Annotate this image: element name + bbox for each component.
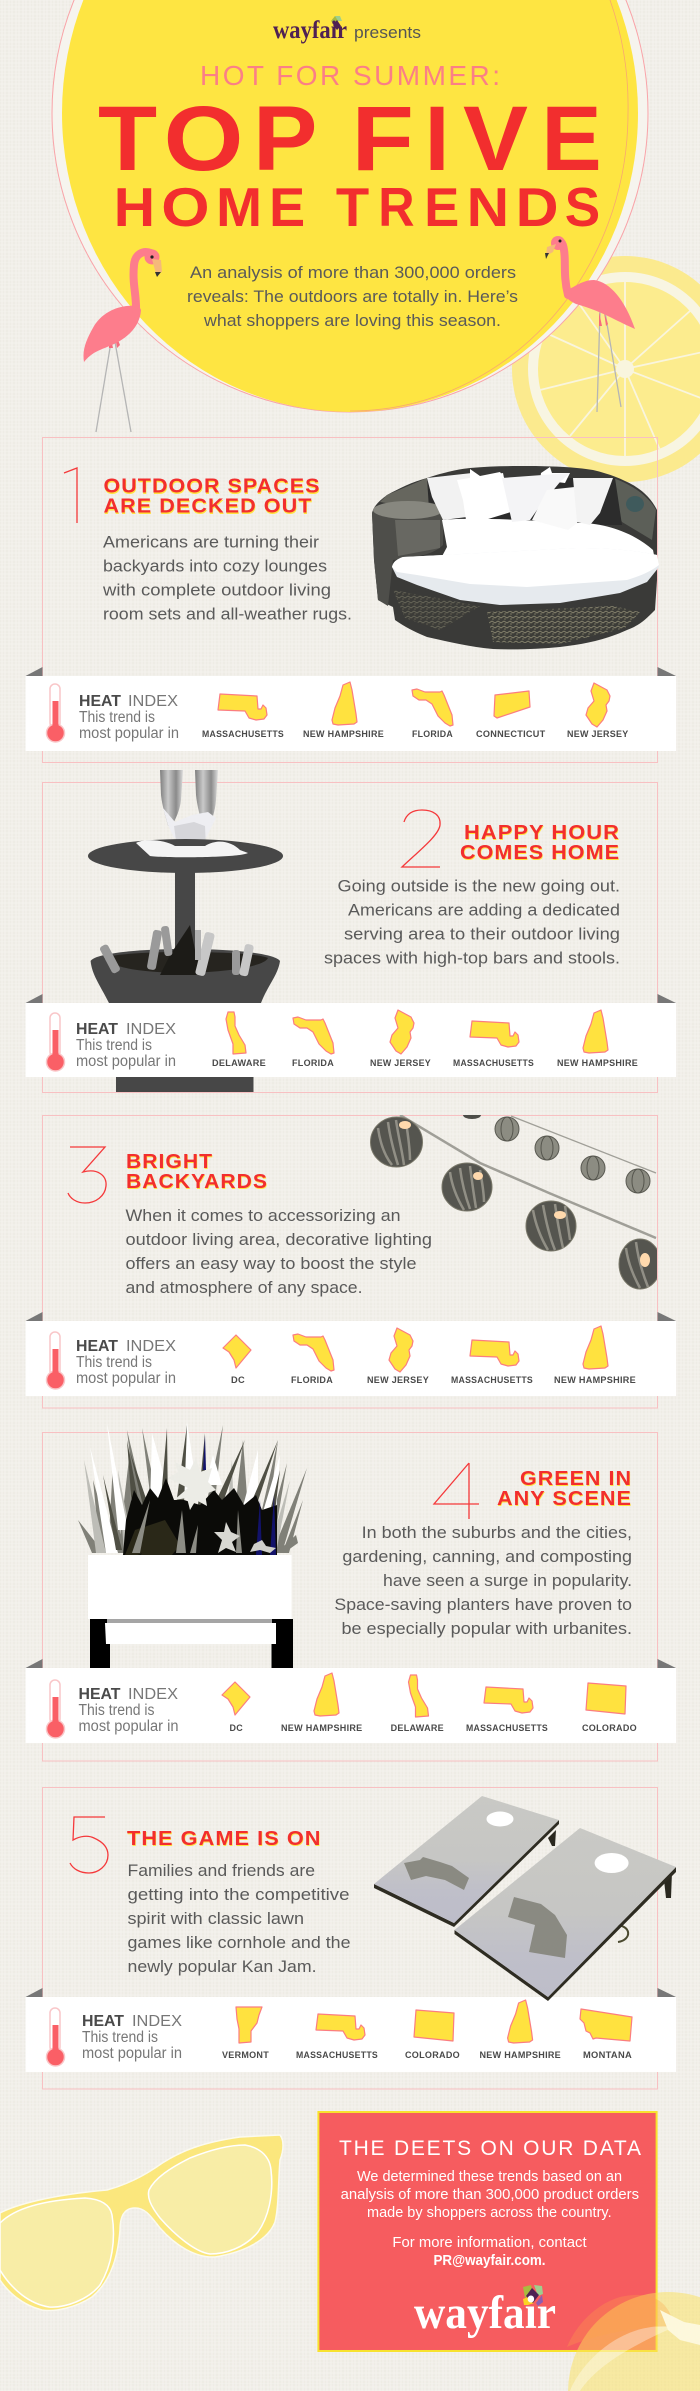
state: DC: [222, 1682, 250, 1734]
icon: left flamingo: [83, 250, 162, 432]
heat index label: INDEX: [128, 693, 179, 710]
title: T: [336, 177, 369, 238]
state: New Jersey: [370, 1010, 431, 1069]
planter box: [88, 1555, 292, 1619]
title: E: [541, 88, 602, 190]
banner: heat index: [26, 1312, 676, 1396]
heat index label: [82, 2013, 183, 2062]
state: New Jersey: [567, 683, 629, 740]
state: Massachusetts: [202, 694, 284, 740]
title: E: [269, 177, 305, 238]
state: Massachusetts: [451, 1340, 533, 1386]
numeral 5: [70, 1817, 108, 1873]
state: Delaware: [212, 1012, 266, 1069]
heading: THE GAME IS ON: [128, 1828, 322, 1851]
heading: HAPPY HOUR: [464, 822, 620, 845]
body text: have seen a surge in popularity.: [383, 1571, 632, 1590]
seat: [440, 519, 655, 560]
icon: right flamingo: [545, 236, 635, 412]
numeral 1: [64, 468, 77, 523]
heading: [104, 475, 321, 519]
logo: wayfair presents: [273, 16, 421, 44]
title: S: [565, 177, 600, 238]
state: Massachusetts: [453, 1021, 534, 1069]
beach ball: [567, 2292, 700, 2391]
state: Massachusetts: [296, 2014, 378, 2061]
body text: [126, 1206, 432, 1297]
hanging buds: [131, 1553, 218, 1568]
intro text: reveals: The outdoors are totally in. Here’s: [187, 287, 518, 306]
heat index label: This trend is: [82, 2029, 158, 2046]
title: [98, 60, 602, 238]
state: Florida: [412, 689, 453, 740]
state: Delaware: DELAWARE: [212, 1058, 266, 1069]
state: New Hampshire: NEW HAMPSHIRE: [554, 1375, 636, 1386]
state: Massachusetts: [466, 1687, 548, 1734]
state: New Hampshire: [557, 1010, 638, 1069]
heading: ARE DECKED OUT: [104, 496, 313, 519]
intro text: [187, 263, 518, 330]
heat index label: This trend is: [76, 1354, 152, 1371]
intro text: what shoppers are loving this season.: [203, 311, 501, 330]
numeral 3: [68, 1147, 106, 1203]
panel: trend 4: [26, 1422, 676, 1761]
state: New Hampshire: NEW HAMPSHIRE: [303, 729, 384, 740]
body text: room sets and all-weather rugs.: [103, 605, 352, 624]
navy blades: [203, 1435, 276, 1555]
state: Florida: FLORIDA: [291, 1375, 333, 1386]
heading: THE GAME IS ON: [127, 1827, 322, 1850]
wicker back and base: [372, 466, 657, 649]
state: DC: [223, 1335, 251, 1386]
icon: thermometer: [46, 1680, 64, 1738]
heat index label: HEAT: [78, 1686, 121, 1703]
state: Massachusetts: MASSACHUSETTS: [453, 1058, 534, 1069]
armrest: [372, 501, 443, 606]
heading: OUTDOOR SPACES: [104, 475, 320, 498]
state: New Hampshire: NEW HAMPSHIRE: [557, 1058, 638, 1069]
heading: GREEN IN: [520, 1468, 632, 1491]
heat index label: [78, 1686, 179, 1735]
state: Montana: MONTANA: [583, 2050, 632, 2061]
white blades: [90, 1422, 280, 1553]
state: Colorado: COLORADO: [582, 1723, 637, 1734]
logo: wayfair: wayfair: [414, 2287, 556, 2339]
title: T: [98, 88, 157, 190]
black mass: [123, 1478, 277, 1555]
body text: backyards into cozy lounges: [103, 557, 327, 576]
title: I: [425, 88, 449, 190]
banner: heat index: [26, 1659, 676, 1743]
white flower: [168, 1458, 216, 1510]
heat index label: INDEX: [126, 1338, 177, 1355]
heading: [497, 1467, 632, 1511]
heading: ANY SCENE: [498, 1488, 632, 1511]
heat index label: [76, 1021, 177, 1070]
state: DC: DC: [231, 1375, 245, 1386]
heat index label: This trend is: [79, 709, 155, 726]
state: New Hampshire: [480, 2000, 561, 2061]
state: Colorado: [582, 1683, 637, 1734]
heat index label: INDEX: [132, 2013, 183, 2030]
heading: OUTDOOR SPACES: [104, 476, 321, 499]
title: H: [114, 177, 155, 238]
state: New Jersey: [367, 1328, 429, 1386]
icon: thermometer: [46, 1013, 64, 1071]
title: D: [516, 177, 559, 238]
body text: getting into the competitive: [128, 1885, 350, 1904]
body text: Space-saving planters have proven to: [334, 1595, 632, 1614]
panel body text: [341, 2169, 639, 2269]
banner: heat index: [26, 1988, 676, 2072]
body text: Families and friends are: [128, 1861, 315, 1880]
front cushion: [392, 548, 659, 605]
panel body text: We determined these trends based on an: [357, 2169, 622, 2185]
state: New Hampshire: [303, 682, 384, 740]
state: DC: DC: [230, 1723, 243, 1734]
heat index label: [76, 1338, 177, 1387]
panel body text: made by shoppers across the country.: [367, 2205, 612, 2221]
state: Florida: [291, 1334, 334, 1386]
left lens: [0, 2198, 114, 2307]
heat index label: HEAT: [82, 2013, 125, 2030]
state: New Hampshire: [281, 1673, 362, 1734]
banner: heat index: [26, 667, 676, 751]
title: R: [378, 177, 415, 238]
state: Delaware: DELAWARE: [391, 1723, 444, 1734]
lemon slice: [512, 256, 700, 482]
intro text: An analysis of more than 300,000 orders: [190, 263, 516, 282]
body text: [102, 533, 352, 624]
state: Florida: FLORIDA: [412, 729, 453, 740]
body text: Americans are adding a dedicated: [348, 901, 620, 920]
sunglasses: [0, 2135, 283, 2310]
heat index label: most popular in: [79, 725, 179, 742]
heat index label: most popular in: [78, 1718, 178, 1735]
small flowers: [214, 1522, 240, 1553]
title: HOT FOR SUMMER:: [200, 60, 500, 91]
title: O: [164, 88, 243, 190]
panel heading: THE DEETS ON OUR DATA: [339, 2137, 641, 2160]
title: P: [253, 88, 317, 190]
state: Colorado: COLORADO: [405, 2050, 460, 2061]
olive blades: [103, 1425, 280, 1550]
body text: Americans are turning their: [103, 533, 319, 552]
heat index label: most popular in: [76, 1053, 176, 1070]
title: V: [463, 88, 528, 190]
heading: [460, 821, 620, 865]
body text: Going outside is the new going out.: [338, 877, 620, 896]
state: New Hampshire: NEW HAMPSHIRE: [480, 2050, 561, 2061]
state: Florida: [292, 1017, 334, 1069]
state: Vermont: VERMONT: [222, 2050, 269, 2061]
state: Montana: [580, 2009, 632, 2061]
state: Massachusetts: MASSACHUSETTS: [296, 2050, 378, 2061]
heat index label: HEAT: [76, 1338, 119, 1355]
product: planter with grasses: [78, 1422, 307, 1668]
state: New Jersey: NEW JERSEY: [370, 1058, 431, 1069]
title: E: [424, 177, 459, 238]
state: Massachusetts: MASSACHUSETTS: [466, 1723, 548, 1734]
panel: the deets on our data: [318, 2112, 657, 2351]
logo: wayfair presents: presents: [354, 23, 421, 42]
heat index label: INDEX: [126, 1021, 177, 1038]
panel body text: analysis of more than 300,000 product orders: [341, 2187, 639, 2203]
body text: [324, 877, 620, 968]
body text: spaces with high-top bars and stools.: [324, 949, 620, 968]
panel body text: PR@wayfair.com.: [434, 2253, 546, 2269]
string lights: [370, 1111, 661, 1289]
wicker texture: [487, 606, 640, 644]
logo: wayfair presents: wayfair: [273, 17, 347, 44]
pillows: [427, 473, 472, 520]
heat index label: most popular in: [76, 1370, 176, 1387]
heading: GREEN IN: [520, 1467, 632, 1490]
heading: BRIGHT: [126, 1151, 214, 1174]
state: New Jersey: NEW JERSEY: [367, 1375, 429, 1386]
state: Connecticut: CONNECTICUT: [476, 729, 546, 740]
state: New Jersey: NEW JERSEY: [567, 729, 629, 740]
state: New Hampshire: [554, 1326, 636, 1386]
heat index label: This trend is: [78, 1702, 155, 1719]
body text: [128, 1861, 350, 1976]
heading: BACKYARDS: [126, 1171, 268, 1194]
title: O: [161, 177, 210, 238]
icon: thermometer: [46, 684, 64, 742]
state: Delaware: [391, 1675, 444, 1734]
state: Massachusetts: MASSACHUSETTS: [202, 729, 284, 740]
heat index label: HEAT: [76, 1021, 119, 1038]
header circle: [52, 0, 648, 412]
body text: games like cornhole and the: [128, 1933, 350, 1952]
right lens: [148, 2145, 272, 2254]
grey blades: [78, 1425, 307, 1553]
body text: outdoor living area, decorative lighting: [126, 1230, 432, 1249]
heat index label: most popular in: [82, 2045, 182, 2062]
body text: gardening, canning, and composting: [342, 1547, 632, 1566]
body text: newly popular Kan Jam.: [128, 1957, 316, 1976]
heat index label: This trend is: [76, 1037, 152, 1054]
heat index label: INDEX: [128, 1686, 179, 1703]
state: New Hampshire: NEW HAMPSHIRE: [281, 1723, 362, 1734]
product: cooler bar table: [88, 770, 283, 1092]
heading: COMES HOME: [460, 841, 620, 864]
title: F: [352, 88, 414, 190]
body text: spirit with classic lawn: [128, 1909, 304, 1928]
grey detail blades: [132, 1500, 242, 1553]
pale blades: [84, 1460, 290, 1553]
state: Connecticut: [476, 691, 546, 740]
product: cornhole boards: [374, 1796, 676, 2001]
state: Vermont: [222, 2007, 269, 2061]
banner: heat index: [26, 994, 676, 1077]
heading: ANY SCENE: [497, 1487, 632, 1510]
body text: be especially popular with urbanites.: [342, 1619, 632, 1638]
title: M: [216, 177, 262, 238]
state: Florida: FLORIDA: [292, 1058, 334, 1069]
state: Colorado: [405, 2010, 460, 2061]
icon: thermometer: [46, 1332, 64, 1389]
heading: ARE DECKED OUT: [104, 495, 312, 518]
body text: and atmosphere of any space.: [126, 1278, 362, 1297]
heading: [126, 1150, 268, 1194]
body text: In both the suburbs and the cities,: [362, 1523, 632, 1542]
body text: serving area to their outdoor living: [344, 925, 620, 944]
numeral 4: [434, 1463, 479, 1519]
panel: trend 1: [26, 438, 676, 762]
icon: thermometer: [46, 2008, 64, 2066]
heading: HAPPY HOUR: [464, 821, 620, 844]
numeral 2: [402, 810, 440, 867]
body text: offers an easy way to boost the style: [126, 1254, 416, 1273]
panel: trend 3: [26, 1111, 676, 1408]
state: Massachusetts: MASSACHUSETTS: [451, 1375, 533, 1386]
heading: BACKYARDS: [126, 1170, 268, 1193]
body text: [334, 1523, 632, 1638]
title: N: [467, 177, 509, 238]
panel: trend 5: [26, 1788, 676, 2089]
heading: BRIGHT: [126, 1150, 213, 1173]
heat index label: HEAT: [79, 693, 122, 710]
product: round outdoor daybed: [372, 466, 659, 649]
body text: When it comes to accessorizing an: [126, 1206, 400, 1225]
panel body text: For more information, contact: [392, 2235, 587, 2251]
heat index label: [79, 693, 179, 742]
heading: COMES HOME: [460, 842, 620, 865]
panel: trend 2: [26, 770, 676, 1092]
body text: with complete outdoor living: [102, 581, 331, 600]
